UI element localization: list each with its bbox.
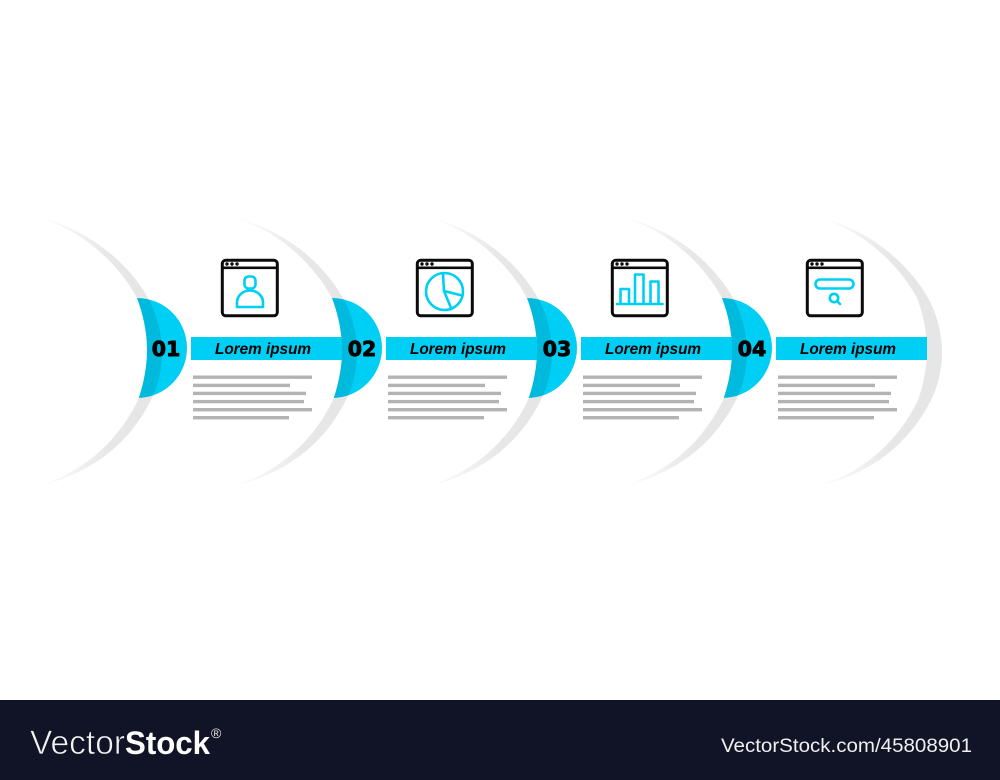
heading bar	[776, 337, 927, 360]
heading bar	[581, 337, 732, 360]
icon: browser window with search	[807, 260, 863, 316]
brand logo: ®	[211, 725, 222, 741]
text placeholder lines	[778, 376, 897, 419]
step 03 blue disc	[477, 298, 577, 398]
heading bar	[191, 337, 342, 360]
number 03: 03	[543, 337, 571, 361]
step 02 blue disc	[282, 298, 382, 398]
background crescent 2	[420, 216, 552, 488]
heading bar	[386, 337, 537, 360]
footer band	[0, 700, 1000, 780]
panel: step 02	[348, 260, 537, 419]
heading bar: Lorem ipsum	[800, 341, 896, 358]
brand logo: Stock	[125, 725, 210, 761]
panel: step 01	[152, 260, 342, 419]
background crescent 4	[810, 216, 942, 488]
brand logo: Vector	[30, 724, 125, 762]
background crescent 1	[225, 216, 357, 488]
brand logo	[30, 724, 222, 762]
text placeholder lines	[583, 376, 702, 419]
heading bar: Lorem ipsum	[215, 341, 311, 358]
number 01: 01	[152, 337, 180, 361]
text placeholder lines	[388, 376, 507, 419]
number 04: 04	[738, 337, 766, 361]
number 02: 02	[348, 337, 376, 361]
icon: browser window with bar chart	[612, 260, 668, 316]
background crescent 0	[30, 216, 162, 488]
heading bar: Lorem ipsum	[410, 341, 506, 358]
step 04 blue disc	[672, 298, 772, 398]
background crescent 3	[615, 216, 747, 488]
step 01 blue disc	[87, 298, 187, 398]
icon: browser window with pie chart	[417, 260, 473, 316]
panel: step 03	[543, 260, 732, 419]
panel: step 04	[738, 260, 927, 419]
image id: VectorStock.com/45808901	[721, 736, 972, 757]
icon: browser window with user	[222, 260, 278, 316]
text placeholder lines	[193, 376, 312, 419]
heading bar: Lorem ipsum	[605, 341, 701, 358]
